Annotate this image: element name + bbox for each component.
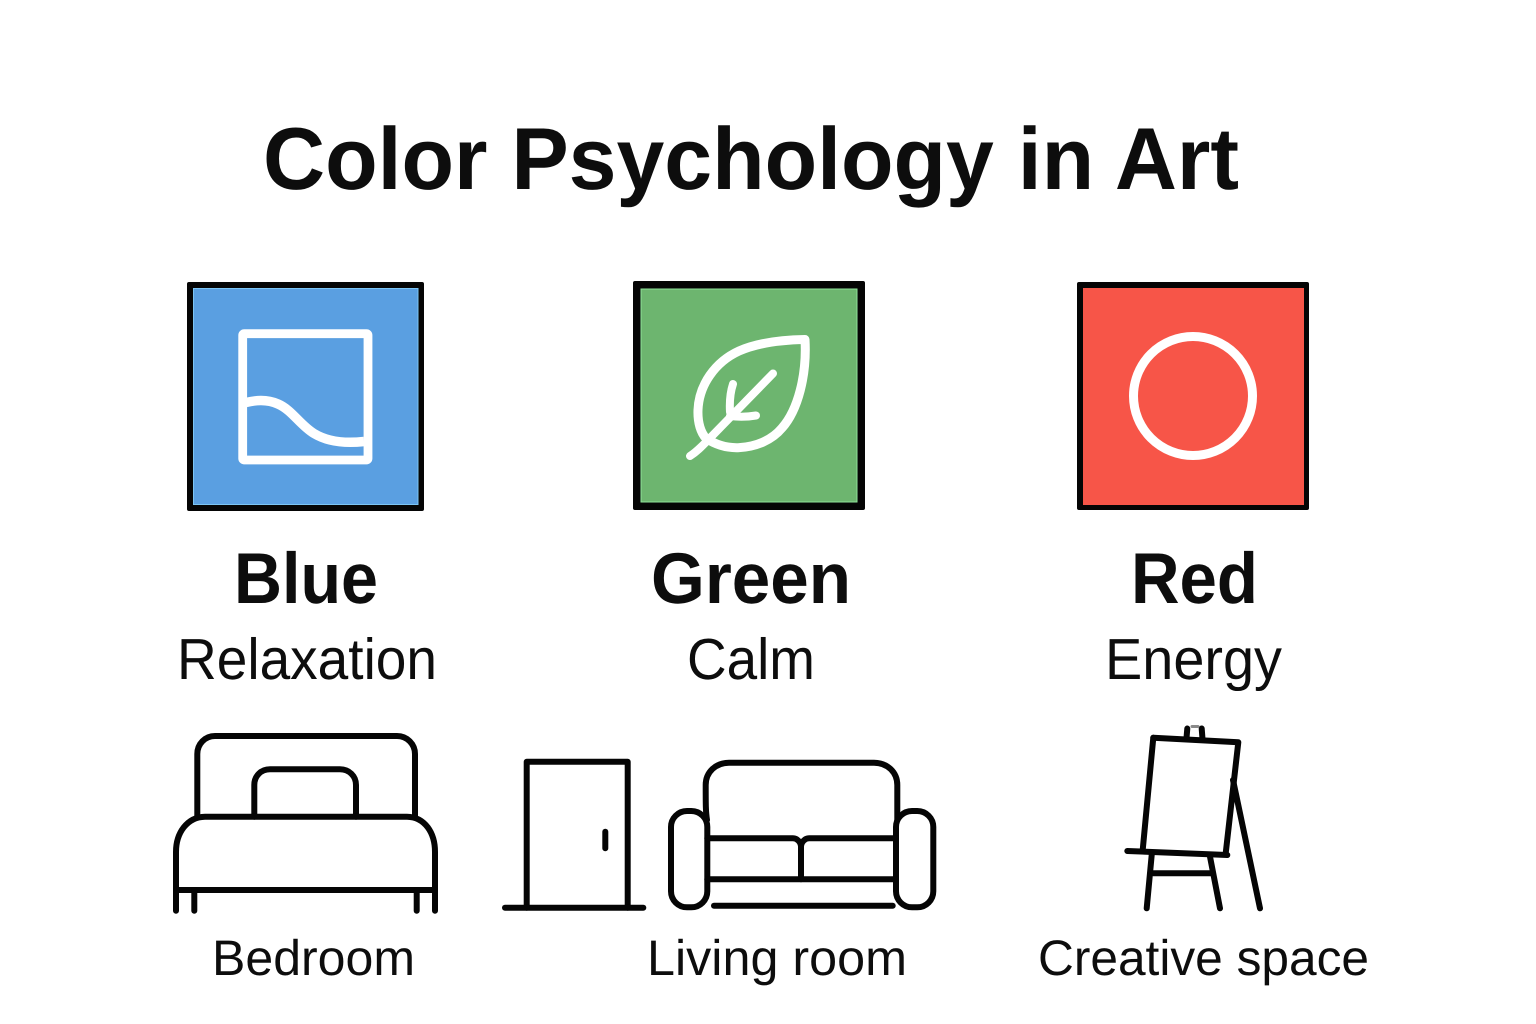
label: Calm: Calm <box>687 627 815 692</box>
green swatch <box>633 281 865 510</box>
label: Living room: Living room <box>647 930 907 986</box>
icon: bed <box>176 736 435 911</box>
title: Color Psychology in Art <box>263 109 1239 208</box>
heading: Blue: Blue <box>234 539 378 619</box>
heading: Green: Green <box>651 539 851 619</box>
panel: red <box>1077 282 1309 692</box>
label: Relaxation: Relaxation <box>177 627 437 692</box>
red swatch <box>1077 282 1309 510</box>
icon: circle <box>1134 336 1252 456</box>
icon: sofa <box>671 763 933 907</box>
blue swatch <box>187 282 424 511</box>
icon: door <box>505 762 643 908</box>
panel: blue <box>177 282 437 692</box>
panel: green <box>633 281 865 692</box>
icon: leaf <box>690 340 805 456</box>
label: Creative space: Creative space <box>1038 930 1369 986</box>
label: Energy: Energy <box>1105 627 1282 692</box>
icon: framed wave <box>243 334 368 460</box>
heading: Red: Red <box>1131 539 1258 619</box>
icon: easel <box>1127 726 1260 908</box>
label: Bedroom: Bedroom <box>212 930 415 986</box>
